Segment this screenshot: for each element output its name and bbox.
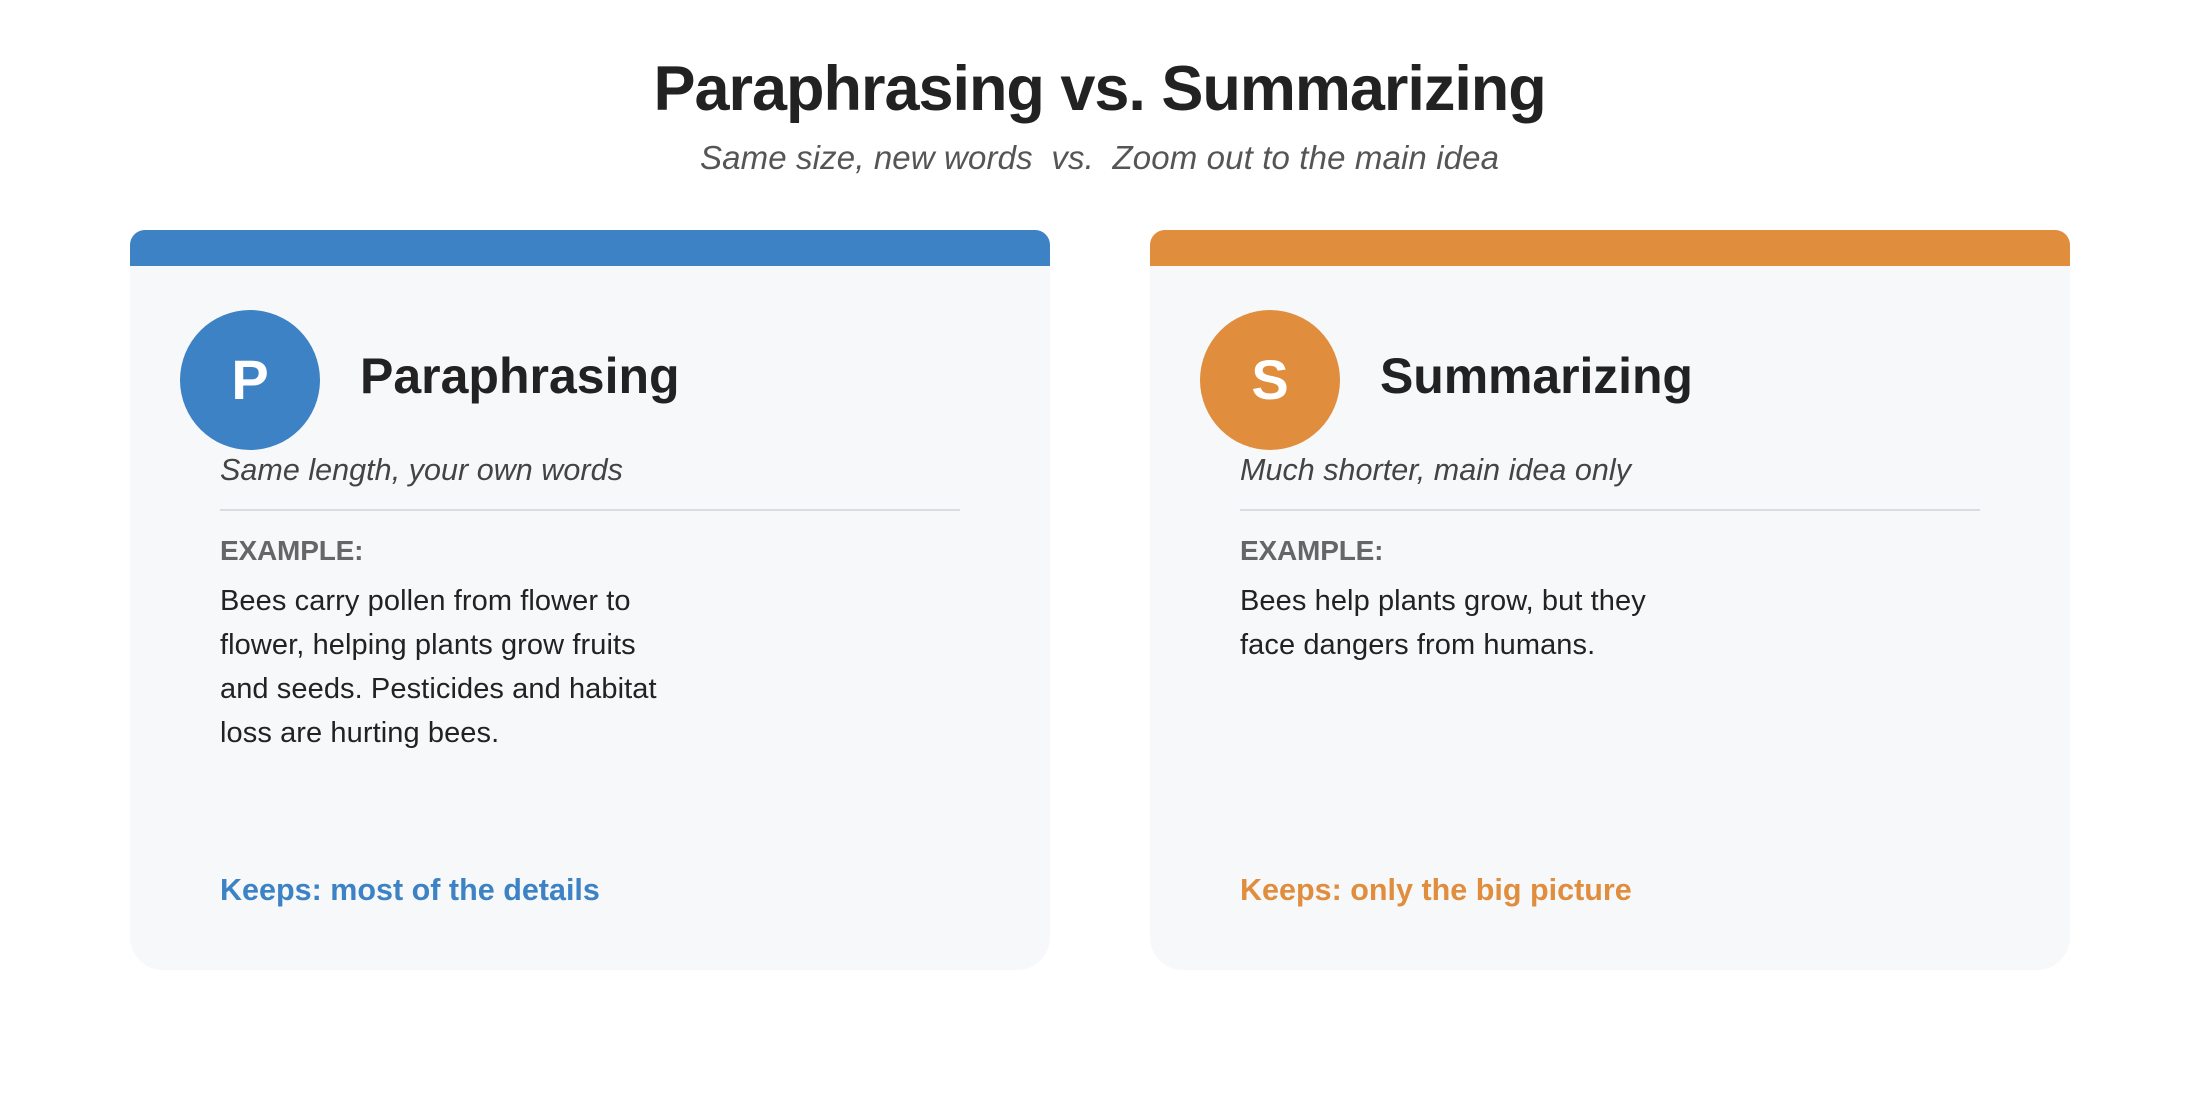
example text: face dangers from humans.	[1240, 629, 1595, 661]
header bar	[1150, 230, 2070, 266]
panel: paraphrasing	[130, 230, 1050, 970]
tagline: Same length, your own words	[220, 453, 623, 487]
example text: flower, helping plants grow fruits	[220, 629, 636, 661]
example label: EXAMPLE:	[1240, 535, 1383, 566]
example text: Bees help plants grow, but they	[1240, 585, 1646, 617]
example text: Bees carry pollen from flower to	[220, 585, 631, 617]
example text: loss are hurting bees.	[220, 717, 499, 749]
icon: S badge: S	[1251, 348, 1289, 411]
panel: summarizing	[1150, 230, 2070, 970]
subtitle: Same size, new words vs. Zoom out to the main idea	[700, 139, 1499, 176]
card heading: Summarizing	[1380, 348, 1693, 404]
card background	[130, 230, 1050, 970]
card heading: Paraphrasing	[360, 348, 680, 404]
icon: P badge	[180, 310, 320, 450]
card background	[1150, 230, 2070, 970]
icon: S badge	[1200, 310, 1340, 450]
keeps note: Keeps: only the big picture	[1240, 873, 1632, 907]
header bar	[130, 230, 1050, 266]
title: Paraphrasing vs. Summarizing	[654, 54, 1546, 124]
icon: P badge: P	[231, 348, 269, 411]
example label: EXAMPLE:	[220, 535, 363, 566]
keeps note: Keeps: most of the details	[220, 873, 600, 907]
tagline: Much shorter, main idea only	[1240, 453, 1633, 487]
example text: and seeds. Pesticides and habitat	[220, 673, 657, 705]
